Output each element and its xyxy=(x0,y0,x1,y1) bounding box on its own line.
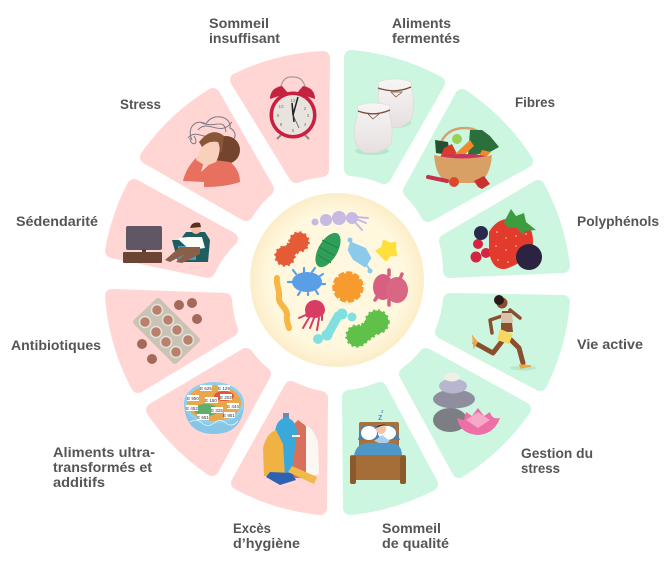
icon: antibiotic blister pack xyxy=(136,298,202,364)
dish xyxy=(250,193,424,367)
panel: antibiotiques xyxy=(112,296,231,386)
wedge shape xyxy=(349,389,431,508)
label: aliments fermentés: Aliments xyxy=(392,16,451,31)
icon: bowl of additives: E 452 xyxy=(186,406,198,411)
icon: person sleeping in bed xyxy=(350,409,406,484)
icon: alarm clock: 3 xyxy=(307,113,310,118)
panel: aliments fermentés xyxy=(351,57,438,177)
label: aliments fermentés: fermentés xyxy=(392,31,460,46)
icon: stressed woman xyxy=(183,117,240,187)
icon: man watching television xyxy=(123,223,210,263)
icon: strawberry and berries xyxy=(470,209,542,270)
icon: alarm clock: 10 xyxy=(278,104,284,109)
icon: bowl of additives: E 129 xyxy=(218,386,230,391)
wedge shape xyxy=(112,186,231,271)
icon: bowl of additives: E 951 xyxy=(223,413,235,418)
microbe: blue diamond xyxy=(348,238,372,274)
panel: gestion du stress xyxy=(406,355,524,471)
icon: bowl of additives: E 325 xyxy=(211,408,223,413)
wedge shape xyxy=(238,388,321,508)
icon: alarm clock: 4 xyxy=(304,122,307,127)
icon: alarm clock xyxy=(270,77,316,139)
panel: fibres xyxy=(410,96,526,215)
icon: bowl of additives: E 150 xyxy=(205,398,217,403)
panel: polyphénols xyxy=(446,187,563,271)
label: gestion du stress: stress xyxy=(521,461,560,476)
label: gestion du stress: Gestion du xyxy=(521,446,593,461)
label: sommeil de qualité: Sommeil xyxy=(382,521,441,536)
icon: bowl of additives: E 950 xyxy=(187,396,199,401)
icon: yogurt jars xyxy=(354,79,413,155)
label: sommeil insuffisant: Sommeil xyxy=(209,16,269,31)
microbe: purple chain xyxy=(312,211,368,230)
wedge shape xyxy=(446,187,563,271)
label: fibres: Fibres xyxy=(515,95,555,110)
panel: aliments ultra-transformés xyxy=(153,355,264,469)
label: aliments ultra-transformés et additifs: additifs xyxy=(53,475,105,490)
label: polyphénols: Polyphénols xyxy=(577,214,659,229)
microbe: crimson jellyfish xyxy=(299,300,325,330)
panel: sédendarité xyxy=(112,186,231,271)
microbe: red dumbbell xyxy=(276,232,308,266)
icon: person sleeping in bed: z xyxy=(381,409,384,415)
microbe: orange blob xyxy=(334,273,362,301)
label: excès d'hygiène: d’hygiène xyxy=(233,536,301,551)
wedge shape xyxy=(237,58,323,176)
panel: excès d'hygiène xyxy=(238,388,321,508)
label: vie active: Vie active xyxy=(577,337,644,352)
panel: sommeil insuffisant xyxy=(237,58,323,176)
icon: woman running xyxy=(473,295,536,370)
icon: bowl of additives xyxy=(184,382,244,434)
icon: alarm clock: 2 xyxy=(304,106,307,111)
icon: alarm clock: 8 xyxy=(280,122,283,127)
icon: bowl of additives: E 202 xyxy=(220,395,232,400)
microbe: cyan chain xyxy=(313,308,356,344)
wedge shape xyxy=(442,300,563,384)
label: aliments ultra-transformés et additifs: Aliments ultra- xyxy=(53,445,155,460)
wedge shape xyxy=(147,95,267,214)
icon: cleaning products xyxy=(263,413,319,485)
microbe: green dumbbell xyxy=(346,310,388,346)
microbe: green ribbed xyxy=(310,229,346,271)
wedge shape xyxy=(112,296,231,386)
icon: bowl of additives: E 625 xyxy=(200,386,212,391)
icon: alarm clock: 9 xyxy=(277,113,280,118)
microbe: pink double xyxy=(373,270,408,305)
label: sommeil insuffisant: insuffisant xyxy=(209,31,281,46)
microbe: blue spiky xyxy=(288,268,325,295)
icon: bowl of additives: E 444 xyxy=(227,404,239,409)
icon: stones and lotus xyxy=(433,372,500,435)
icon: vegetable basket xyxy=(428,128,499,189)
wedge shape xyxy=(410,96,526,215)
label: stress: Stress xyxy=(120,97,161,112)
wedge shape xyxy=(153,355,264,469)
panel: sommeil de qualité xyxy=(349,389,431,508)
label: sommeil de qualité: de qualité xyxy=(382,536,450,551)
wedge shape xyxy=(406,355,524,471)
icon: person sleeping in bed: z xyxy=(378,412,383,422)
label: excès d'hygiène: Excès xyxy=(233,521,271,536)
label: sédendarité: Sédendarité xyxy=(16,214,99,229)
panel: central microbiome dish xyxy=(250,193,424,367)
label: antibiotiques: Antibiotiques xyxy=(11,338,101,353)
microbe: yellow worm xyxy=(277,278,289,328)
panel: vie active xyxy=(442,295,563,384)
icon: alarm clock: 12 xyxy=(290,98,296,103)
wedge shape xyxy=(351,57,438,177)
icon: alarm clock: 6 xyxy=(292,128,295,133)
label: aliments ultra-transformés et additifs: transformés et xyxy=(53,460,153,475)
microbe: yellow star xyxy=(377,241,396,260)
panel: stress xyxy=(147,95,267,214)
icon: bowl of additives: E 651 xyxy=(197,415,209,420)
